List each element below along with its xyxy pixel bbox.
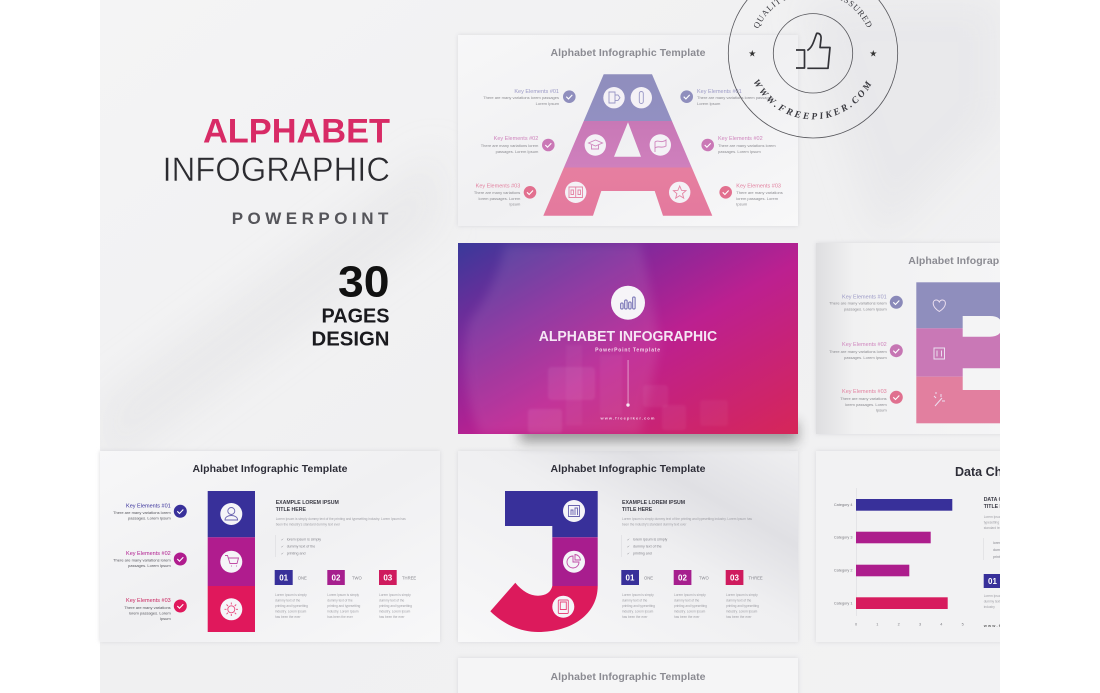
I labels: Key Elements #02 [126,551,171,557]
bottom slide heading: Alphabet Infographic Template [550,671,706,683]
I column text: industry. Lorem Ipsum [327,610,359,614]
A labels left: Key Elements #02 [494,136,538,142]
icon: thumbs up [796,33,830,68]
J text block: Lorem Ipsum is simply dummy text of the printing and typesetting industry. Lorem Ipsum has [622,517,752,521]
cover shadow [520,422,798,442]
B check badges [890,296,903,404]
J column text: industry. Lorem Ipsum [726,610,758,614]
A labels right: Key Elements #02 [718,136,763,142]
A labels right: Lorem Ipsum [697,101,721,106]
I labels: lorem passages. Lorem [129,610,171,616]
I labels: There are many variations lorem [113,558,171,562]
I numbered boxes: 02 [332,574,341,582]
data text block: dummy text [984,600,1000,604]
J numbered boxes: 03 [730,574,739,582]
I labels [113,504,171,621]
data text block: www.freepiker.com [983,623,1040,628]
data text block: TITLE HERE [984,504,1015,510]
I column text: printing and typesetting [275,604,308,608]
A labels right: There are many variations lorem passages [697,95,773,100]
I labels: Key Elements #03 [126,598,171,604]
A labels left: There are many variations lorem passages [483,95,559,100]
I text block: been the industry's standard dummy text ever [276,522,341,526]
data text block: printing [993,555,1005,559]
J text block: dummy text of the [633,544,662,548]
title block [162,113,393,351]
letter I column [208,491,255,632]
cover icon [611,286,645,320]
letter J shape [490,491,598,632]
J column text: Lorem Ipsum is simply [674,593,706,597]
A labels left: Key Elements #01 [514,89,559,95]
A labels left: lorem passages. Lorem [479,196,521,201]
bar chart: 4 [940,622,942,626]
I column text: printing and typesetting [327,604,360,608]
data text block: lorem [993,541,1002,545]
slide: letter J [458,451,798,642]
bar chart [834,488,964,626]
bar chart: 5 [962,622,964,626]
B labels [829,294,887,412]
slide: letter A [458,35,798,226]
bar chart: Category 4 [834,503,852,507]
J column text: industry. Lorem Ipsum [674,610,706,614]
J text block: lorem ipsum is simply [633,538,668,542]
B labels: There are many variations lorem [829,349,887,354]
diagonal light shadows [972,32,973,104]
slide heading: Alphabet Infographic Template [550,47,706,59]
I column text: printing and typesetting [379,604,412,608]
J column text: has been the ever [674,615,700,619]
slide: data chart [815,450,1000,643]
slide: partial bottom [458,658,798,693]
I check badges [174,505,187,612]
J column text: industry. Lorem Ipsum [622,610,654,614]
cover line and dot [626,360,630,407]
I numbered boxes [275,570,416,585]
data text block: industry [984,605,995,609]
cover photo overlay [465,243,728,434]
J column text: printing and typesetting [674,604,707,608]
J text block: printing and [633,552,652,556]
data text block: Lorem Ipsum [984,594,1003,598]
J column text: dummy text of the [674,598,700,602]
J icon circles [552,500,585,618]
A check badges [524,90,732,199]
B labels: passages. Lorem Ipsum [844,306,887,311]
I numbered boxes: 03 [383,574,393,582]
data text block: typesetting [984,520,999,524]
cover title: ALPHABET INFOGRAPHIC [539,329,718,345]
bar chart: 2 [898,622,900,626]
I labels: There are many variations lorem [113,510,171,515]
I labels: passages. Lorem Ipsum [128,516,171,520]
A labels right: lorem passages. Lorem [736,196,779,201]
J column text: dummy text of the [726,598,752,602]
I text block: printing and [287,552,305,556]
bar chart: Category 3 [834,536,852,540]
cover subtitle: PowerPoint Template [595,348,661,354]
A labels right: There are many variations [736,190,783,195]
J column text: has been the ever [726,615,752,619]
stamp text bottom: WWW.FREEPIKER.COM [754,78,872,120]
J column text: printing and typesetting [622,604,655,608]
bar chart: Category 1 [834,601,852,605]
J text block [622,500,752,557]
B heading: Alphabet Infographic Template [908,255,1063,267]
B labels: Ipsum [876,408,887,412]
quality stamp [728,0,898,138]
A labels right [697,89,783,206]
J column text: dummy text of the [622,598,648,602]
J text block: been the industry's standard dummy text ever [622,522,687,526]
I text block: TITLE HERE [276,507,307,513]
I text block: dummy text of the [287,544,315,548]
J numbered boxes [621,570,763,585]
data text block [984,497,1000,627]
title: INFOGRAPHIC: INFOGRAPHIC [162,151,390,189]
bar chart: 1 [876,622,878,626]
J numbered boxes: TWO [699,576,710,580]
J numbered boxes: THREE [748,576,763,580]
B icons [933,300,945,406]
A labels right: Key Elements #01 [697,89,742,95]
A labels right: Ipsum [736,202,748,206]
I column text: dummy text of the [379,598,405,602]
page count: 30 [338,258,390,307]
A labels left: Ipsum [509,202,521,206]
subtitle: POWERPOINT: POWERPOINT [232,209,393,228]
I column text: has been the ever [327,615,354,619]
I labels: Key Elements #01 [126,504,171,510]
A icon glyphs [569,92,686,198]
title: ALPHABET: ALPHABET [203,113,390,151]
I text block [276,500,406,557]
I labels: There are many variations [124,605,171,610]
I column text: Lorem Ipsum is simply [275,593,307,597]
stamp stars: ★ [748,48,756,58]
I labels: Ipsum [160,616,171,621]
slide: cover [458,243,798,434]
A labels left [474,89,560,206]
J column text: has been the ever [622,615,648,619]
data text block: 01 [988,577,997,586]
J text block: TITLE HERE [622,507,653,513]
I column text: dummy text of the [275,598,301,602]
B labels: Key Elements #03 [842,389,887,395]
I numbered boxes: THREE [402,576,416,580]
I text block: EXAMPLE LOREM IPSUM [276,500,339,506]
I column text: Lorem Ipsum is simply [327,593,359,597]
I labels: passages. Lorem Ipsum [128,563,171,568]
A labels left: passages. Lorem Ipsum [496,149,539,154]
J column text: Lorem Ipsum is simply [726,593,758,597]
I text block: Lorem Ipsum is simply dummy text of the printing and typesetting industry. Lorem Ipsum has [276,517,406,521]
J column text: printing and typesetting [726,604,759,608]
stamp star right: ★ [869,48,877,58]
letter A shape [543,74,712,216]
data text block: standard text [984,526,1002,530]
I icon circles [220,503,242,620]
A labels left: Lorem Ipsum [536,101,560,106]
J heading: Alphabet Infographic Template [550,463,706,475]
cover URL: www.freepiker.com [599,416,656,421]
chart heading: Data Chart [955,465,1019,479]
I numbered boxes: 01 [279,574,289,582]
A labels left: Key Elements #03 [476,183,520,189]
J numbered boxes: 02 [678,574,687,582]
J numbered boxes: 01 [626,574,635,582]
design label: DESIGN [312,329,390,351]
I column text: dummy text of the [327,598,353,602]
data text block: DATA CHART [984,497,1018,503]
I column text: industry. Lorem Ipsum [379,610,411,614]
bar chart: Category 2 [834,569,852,573]
J column text: Lorem Ipsum is simply [622,593,654,597]
A labels right: Key Elements #03 [736,183,781,189]
I column text: industry. Lorem Ipsum [275,610,307,614]
I heading: Alphabet Infographic Template [192,463,348,475]
I numbered boxes: TWO [352,576,363,580]
A labels right: There are many variations lorem [718,143,776,148]
B labels: There are many variations lorem [829,300,887,305]
data text block: dummy [993,548,1005,552]
A labels left: There are many variations lorem [481,143,539,148]
slide: letter B [815,242,1000,435]
B labels: There are many variations [840,396,887,401]
J text block: EXAMPLE LOREM IPSUM [622,500,685,506]
A labels left: There are many variations [474,190,520,195]
I column text: Lorem Ipsum is simply [379,593,411,597]
B labels: Key Elements #02 [842,342,887,348]
pages label: PAGES [322,306,390,328]
I column text: has been the ever [275,615,301,619]
bar chart: 0 [855,622,857,626]
data text block: Lorem Ipsum [984,515,1003,519]
B labels: passages. Lorem Ipsum [844,355,887,360]
I column text [275,593,412,619]
slide: letter I [100,451,440,642]
A icon circles [565,87,690,203]
J column text [622,593,759,619]
A labels right: passages. Lorem Ipsum [718,149,761,154]
B labels: lorem passages. Lorem [845,402,887,407]
B labels: Key Elements #01 [842,294,887,300]
I text block: lorem ipsum is simply [287,538,321,542]
letter B shape [916,282,1006,423]
I numbered boxes: ONE [298,576,307,580]
J numbered boxes: ONE [644,576,653,580]
bar chart: 3 [919,622,921,626]
I column text: has been the ever [379,615,405,619]
